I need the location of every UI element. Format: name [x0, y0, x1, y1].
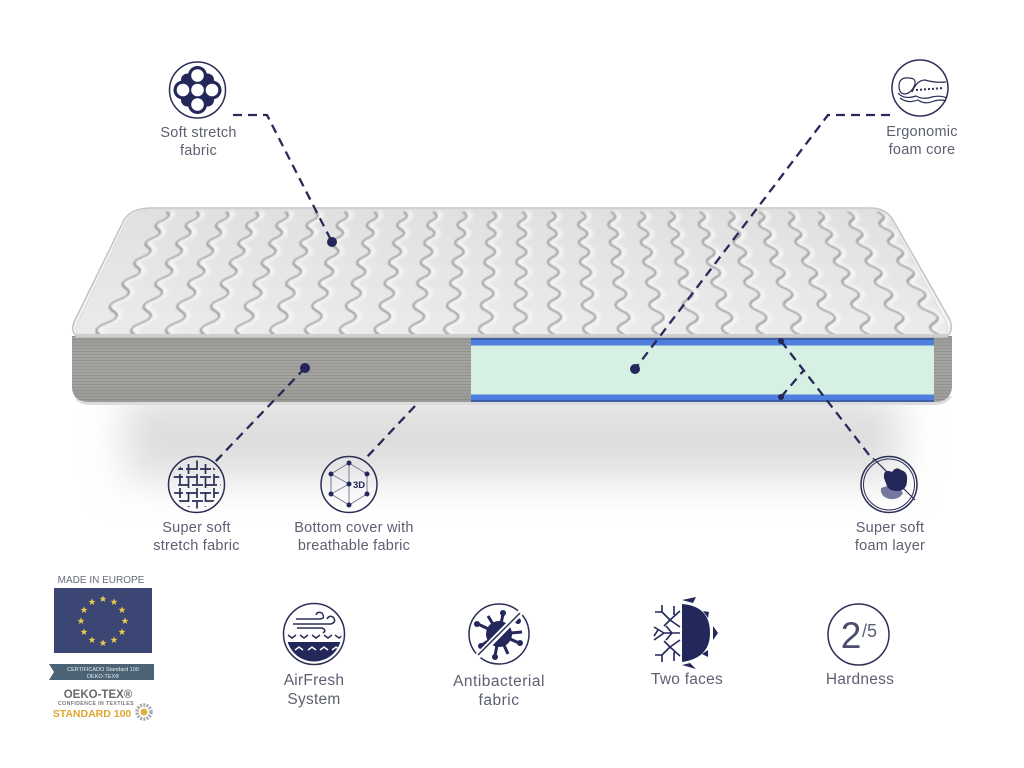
mattress — [72, 208, 952, 405]
feature: two faces — [651, 597, 723, 688]
badges: made in Europe and Oeko-Tex — [49, 575, 154, 720]
feature: AirFresh system — [284, 604, 344, 708]
certificate ribbon — [49, 664, 154, 680]
icon: woven fabric — [168, 456, 224, 512]
side fabric — [72, 336, 952, 402]
icon: 3D mesh: 3D — [353, 480, 365, 491]
leader: super soft foam layer — [778, 338, 873, 460]
icon: circle knit — [170, 62, 226, 118]
feature: antibacterial fabric — [453, 604, 545, 709]
icon: air and waves — [284, 604, 344, 666]
Oeko-Tex logo: OEKO-TEX® — [64, 689, 133, 701]
heading: MADE IN EUROPE — [58, 575, 145, 586]
feature: super soft foam layer — [855, 456, 925, 554]
icon: hardness rating: 2 — [841, 615, 861, 656]
label: foam layer — [855, 538, 925, 554]
leader: bottom cover — [366, 406, 415, 458]
certificate ribbon: CERTIFICADO Standard 100 — [67, 667, 139, 673]
quilted top — [73, 208, 951, 337]
certificate ribbon: OEKO-TEX® — [87, 673, 119, 680]
infographic canvas — [49, 59, 958, 721]
label: Soft stretch — [160, 125, 237, 141]
icon: crossed bacteria — [469, 604, 529, 664]
Oeko-Tex logo: STANDARD 100 — [53, 708, 131, 720]
leader: side stretch fabric — [215, 363, 310, 462]
label: Hardness — [826, 671, 894, 688]
label: System — [287, 691, 341, 708]
label: Super soft — [856, 520, 924, 536]
foam cross-section — [471, 338, 934, 402]
label: Bottom cover with — [294, 520, 414, 536]
feature: ergonomic foam core — [886, 60, 958, 158]
icon: hand pressing foam — [861, 456, 917, 512]
icon: hardness rating: /5 — [862, 621, 877, 641]
mattress bottom lip — [76, 396, 952, 405]
Oeko-Tex logo: CONFIDENCE IN TEXTILES — [58, 701, 134, 707]
feature: soft stretch fabric — [160, 62, 237, 159]
label: foam core — [889, 142, 955, 158]
feature: hardness — [826, 604, 894, 688]
leader: ergonomic foam core — [630, 115, 890, 374]
icon: half sun half snowflake — [654, 597, 718, 669]
label: AirFresh — [284, 672, 344, 689]
Oeko-Tex logo — [53, 689, 151, 720]
label: Super soft — [162, 520, 231, 536]
label: stretch fabric — [153, 538, 240, 554]
feature: super soft stretch fabric — [153, 456, 240, 554]
label: breathable fabric — [298, 538, 410, 554]
EU flag — [54, 588, 152, 653]
label: Antibacterial — [453, 673, 545, 690]
icon: hardness rating — [828, 604, 889, 665]
floor shadow — [125, 395, 900, 480]
label: fabric — [180, 143, 217, 159]
icon: body on foam — [892, 60, 948, 116]
feature: bottom cover — [294, 456, 414, 554]
leader: soft stretch fabric — [233, 115, 337, 247]
label: Ergonomic — [886, 124, 958, 140]
label: Two faces — [651, 671, 723, 688]
label: fabric — [479, 692, 519, 709]
